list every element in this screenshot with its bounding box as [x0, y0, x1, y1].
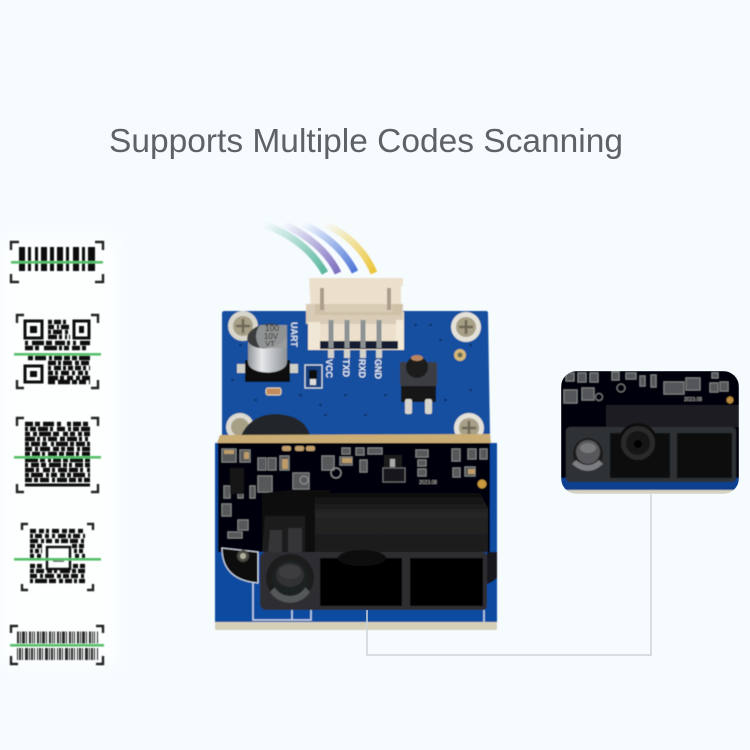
title: Supports Multiple Codes Scanning	[109, 123, 623, 160]
black sensor PCB	[218, 443, 490, 552]
sensor housing top	[262, 490, 330, 552]
pin header labels: TXD	[341, 359, 351, 378]
aimer lens	[266, 554, 314, 603]
window left	[320, 558, 402, 606]
callout leader line	[367, 494, 651, 655]
window right	[410, 558, 483, 606]
PCB via dots	[232, 325, 471, 415]
icon: dense barcode scan	[10, 626, 104, 664]
icon: data matrix scan	[14, 418, 101, 492]
sensor housing front	[260, 552, 487, 610]
inset components	[564, 372, 728, 403]
connector pins pads	[331, 345, 379, 358]
white connector	[306, 278, 404, 350]
black IC cap	[241, 414, 310, 436]
gold via	[454, 349, 466, 361]
PCB components: 2023.08	[419, 480, 437, 486]
pin header labels	[324, 359, 383, 380]
inset housing	[606, 405, 739, 427]
wires	[262, 224, 374, 273]
silk traces on blue	[253, 583, 484, 622]
mounting screws	[226, 311, 484, 443]
diode footprint	[305, 365, 322, 388]
inset: sensor close-up	[561, 371, 739, 494]
capacitor	[237, 321, 298, 382]
icon column backdrop	[0, 240, 118, 665]
pin header labels: VCC	[324, 359, 334, 379]
pin header labels: RXD	[357, 359, 367, 379]
scanner board	[215, 278, 497, 630]
inset: sensor close-up: 2023.08	[684, 397, 702, 403]
pin header labels: GND	[373, 359, 383, 380]
small resistor	[266, 388, 281, 395]
lower board backing	[215, 443, 497, 622]
PCB components	[222, 446, 487, 538]
icon: aztec code scan	[14, 524, 101, 590]
blue PCB upper	[222, 311, 490, 436]
lens shadow	[338, 550, 386, 566]
capacitor: 100	[265, 323, 279, 333]
tan board edge	[215, 622, 497, 630]
icon: linear barcode scan	[11, 242, 103, 282]
icon: QR code scan	[14, 315, 101, 388]
capacitor: VT	[265, 339, 275, 348]
UART silkscreen: UART	[289, 322, 299, 347]
gold PCB edge	[217, 434, 491, 443]
capacitor: 10V	[264, 332, 279, 341]
tactile button	[400, 355, 437, 414]
